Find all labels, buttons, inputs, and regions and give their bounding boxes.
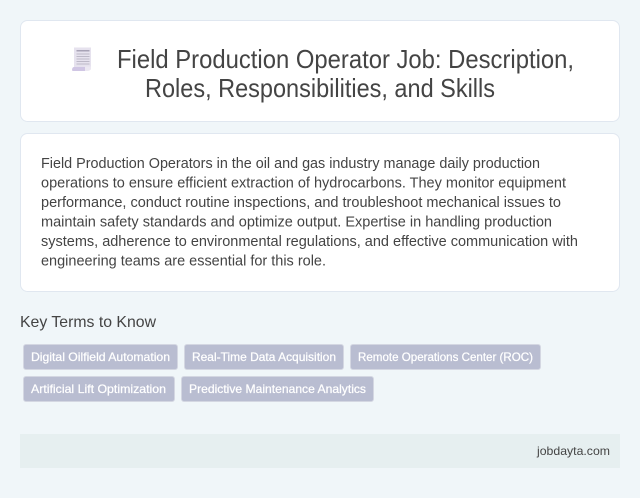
heading: title: Field Production Operator Job: Description, — [117, 46, 574, 74]
tag list: key terms — [24, 344, 540, 402]
heading: title: Roles, Responsibilities, and Skills — [145, 75, 495, 103]
text block: description: engineering teams are essential for this role. — [41, 254, 326, 270]
heading: title — [117, 46, 574, 103]
text block: description: systems, adherence to environmental regulations, and effective communication with — [41, 234, 578, 250]
tag: digital oilfield automation: Digital Oilfield Automation — [31, 350, 170, 364]
tag: remote operations center — [350, 344, 540, 370]
tag: digital oilfield automation — [24, 344, 178, 370]
text block: description: performance, conduct routine inspections, and troubleshoot mechanical issues to — [41, 195, 561, 211]
footer bar — [20, 434, 620, 468]
tag: artificial lift optimization — [24, 376, 174, 402]
text block: description: operations to ensure efficient extraction of hydrocarbons. They monitor equipment — [41, 176, 566, 192]
panel: description card — [20, 134, 620, 292]
tag: predictive maintenance analytics — [182, 376, 374, 402]
tag: real-time data acquisition — [184, 344, 344, 370]
tag: predictive maintenance analytics: Predictive Maintenance Analytics — [189, 382, 366, 396]
text block: description: maintain safety standards and optimize output. Expertise in handling production — [41, 214, 552, 230]
text block: description — [41, 156, 578, 270]
text block: description: Field Production Operators in the oil and gas industry manage daily production — [41, 156, 540, 172]
footer text: site name: jobdayta.com — [536, 444, 610, 458]
heading: key terms: Key Terms to Know — [20, 314, 156, 331]
tag: real-time data acquisition: Real-Time Data Acquisition — [192, 350, 336, 364]
tag: artificial lift optimization: Artificial Lift Optimization — [31, 382, 166, 396]
icon: document scroll — [72, 48, 91, 71]
panel: title card — [20, 20, 620, 122]
tag: remote operations center: Remote Operations Center (ROC) — [358, 350, 533, 364]
